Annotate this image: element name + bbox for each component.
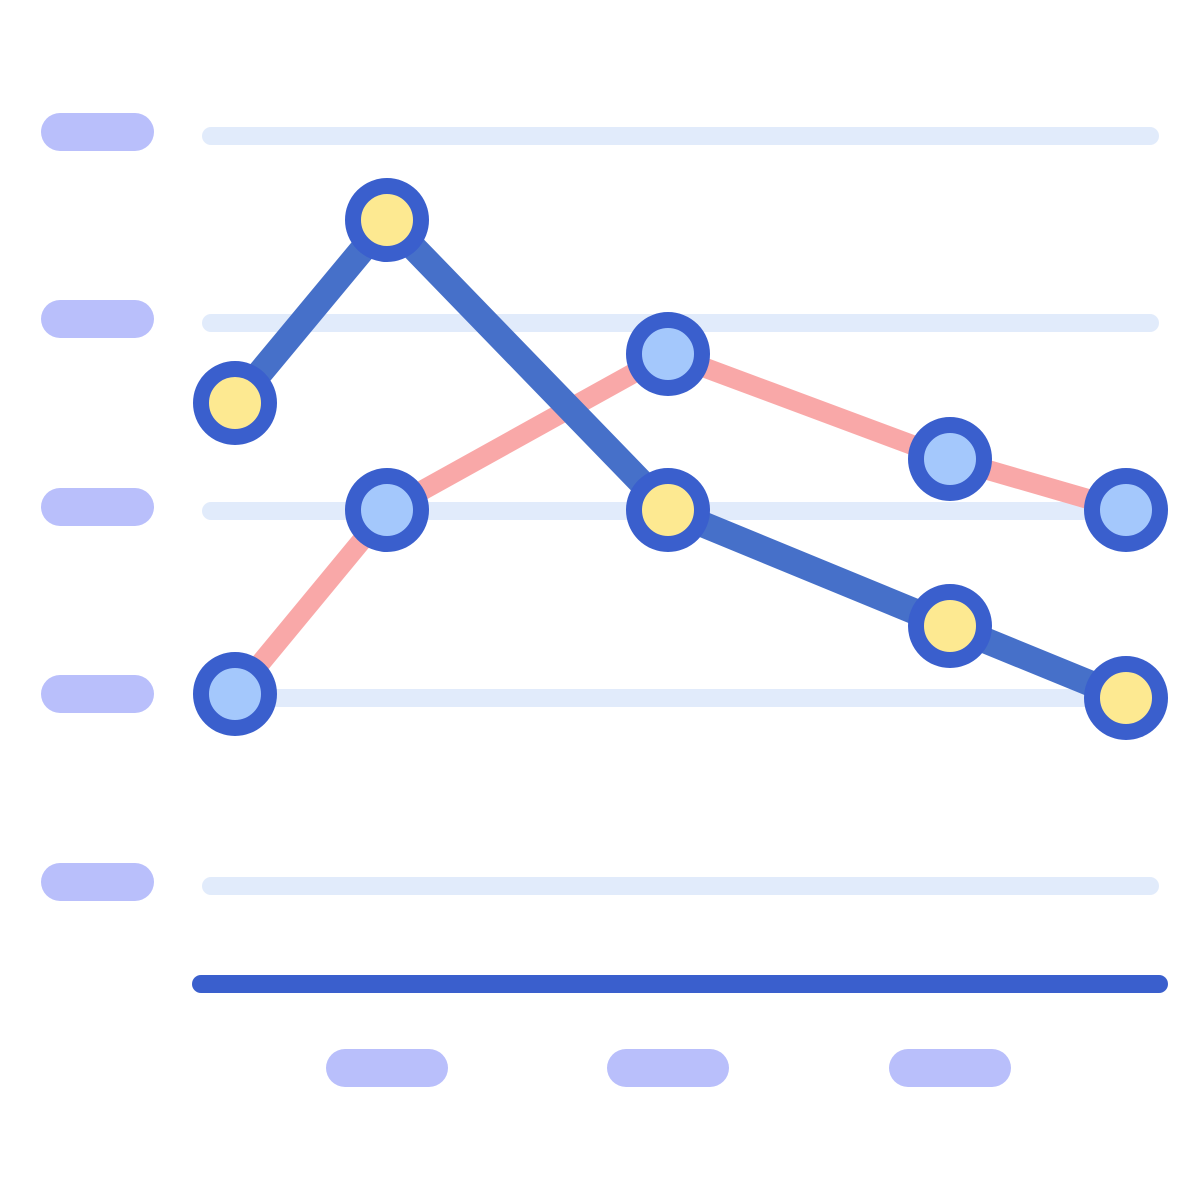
x-axis labels <box>326 1049 1011 1087</box>
pink series points <box>201 320 1160 728</box>
y-axis labels <box>41 113 154 901</box>
blue series points <box>201 186 1160 732</box>
x-axis <box>201 975 1159 993</box>
blue series line <box>235 220 1126 698</box>
pink series line <box>235 354 1126 694</box>
